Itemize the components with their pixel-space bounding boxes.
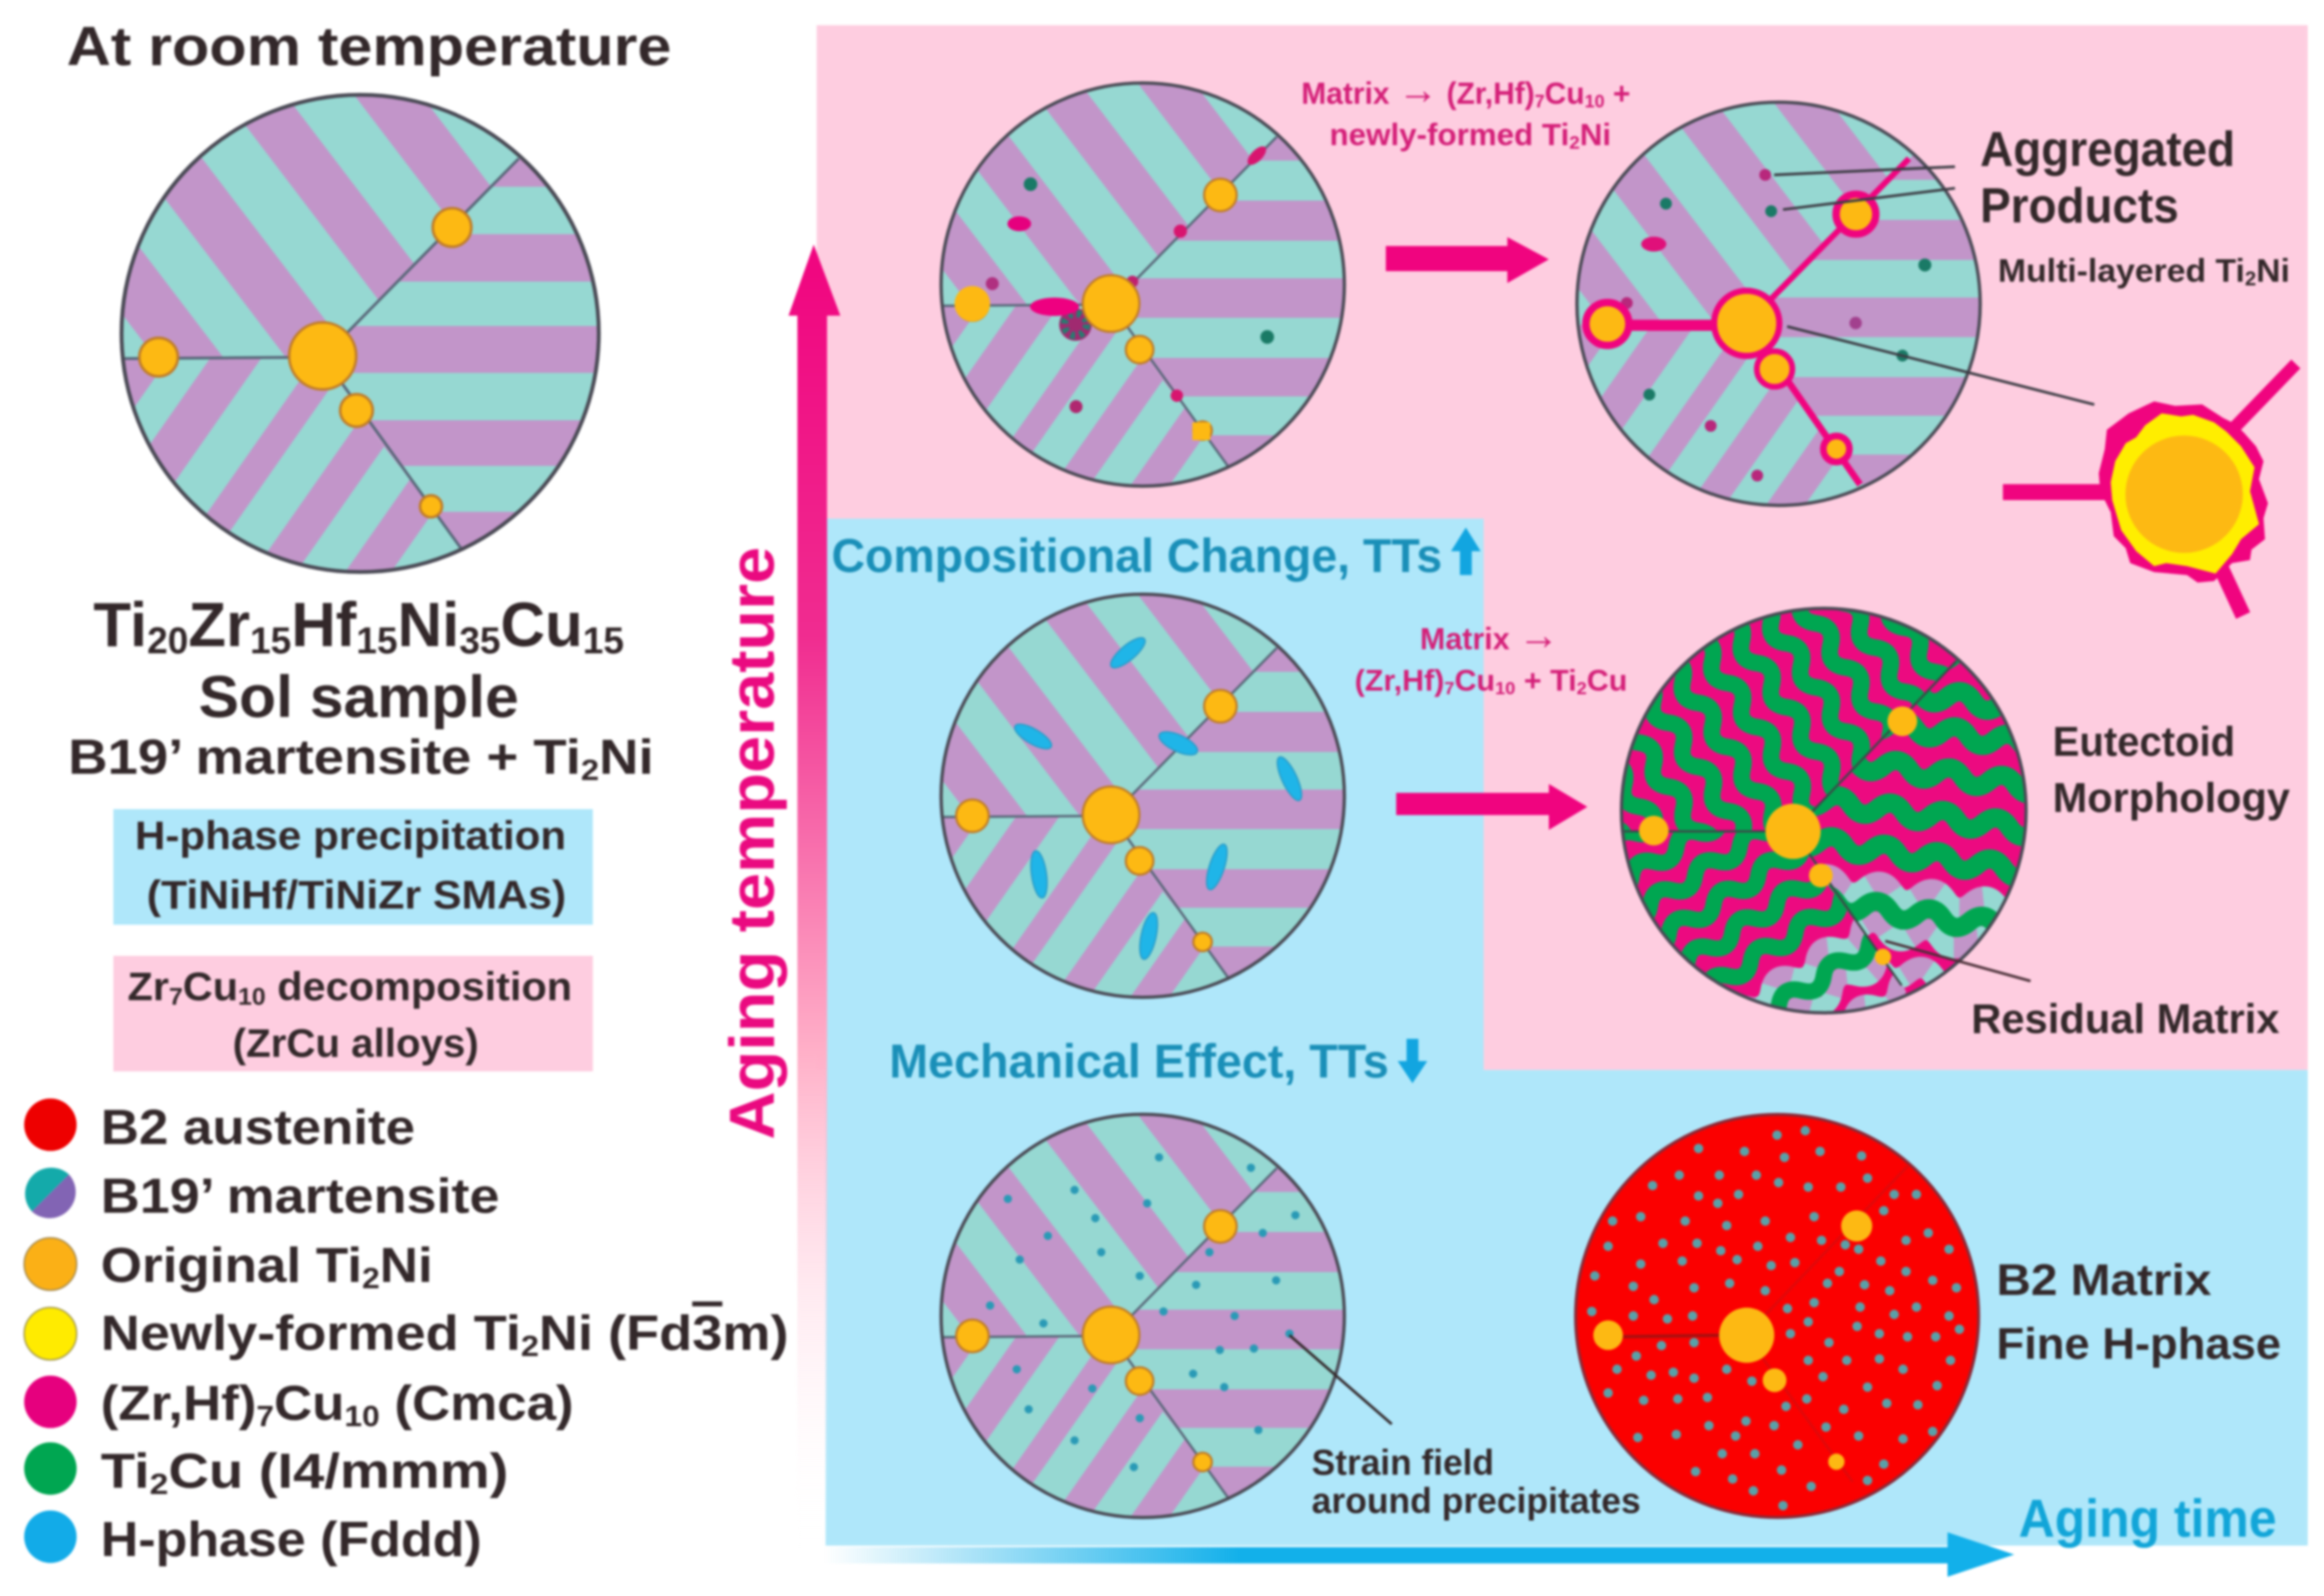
diagram: initial sol sample microstructure: [0, 59, 711, 623]
reaction label: matrix to Zr,Hf 7Cu10 and newly-formed Ti2Ni: Matrix → (Zr,Hf)7Cu10 +: [1301, 66, 1630, 112]
legend item: (Zr,Hf)7Cu10: (Zr,Hf) 7Cu 10 (Cmca): [101, 1376, 573, 1432]
label: strain field around precipitates: Strain field: [1312, 1443, 1494, 1483]
leader line: to enlarged particle: [1787, 326, 2094, 404]
grain boundary magenta layers: [1608, 158, 1909, 484]
panel: pink aging region: [817, 25, 2308, 1070]
arrow: aging temperature axis: [788, 244, 840, 1548]
precipitate: mottled cluster: [1060, 308, 1092, 341]
label: strain field around precipitates: around precipitates: [1312, 1482, 1641, 1521]
precipitates: green dots: [1644, 198, 1931, 401]
leader line: strain field: [1290, 1335, 1392, 1424]
reaction label: matrix to Zr,Hf 7Cu10 and newly-formed Ti2Ni: newly-formed Ti2Ni: [1329, 119, 1611, 154]
particles: original Ti2Ni: [1593, 1210, 1872, 1470]
precipitates: H-phase lenticular: [1011, 634, 1306, 961]
diagram: strain field around fine precipitates: [725, 1085, 1439, 1560]
icon: up arrow: [1451, 528, 1481, 575]
legend item: B19' martensite: B19’ martensite: [101, 1169, 500, 1224]
heading: mechanical effect: Mechanical Effect, TTs: [890, 1035, 1388, 1088]
label: aggregated products: Aggregated: [1980, 122, 2235, 177]
legend item: newly-formed Ti2Ni: Newly-formed Ti 2Ni (Fd 3m): [101, 1306, 788, 1362]
particles: original Ti2Ni: [1639, 706, 1917, 965]
grain boundaries: [1623, 661, 1956, 986]
heading: phases of sol sample: B19’ martensite + Ti 2Ni: [68, 730, 653, 785]
panel: blue aging region: [826, 519, 2308, 1546]
particles: partially consumed Ti2Ni: [954, 286, 1211, 440]
label: multi-layered Ti2Ni: Multi-layered Ti 2Ni: [1998, 252, 2290, 290]
legend: phases: [24, 1098, 788, 1566]
diagram: eutectoid morphology: [1618, 605, 2029, 1016]
precipitates: magenta: [986, 143, 1269, 413]
diagram: B2 matrix with fine H-phase: [1575, 1114, 1979, 1518]
heading: sol sample: Sol sample: [199, 663, 519, 730]
leader line: residual matrix: [1885, 941, 2030, 981]
inset: enlarged multi-layered Ti2Ni particle: [2003, 364, 2296, 616]
legend item: original Ti2Ni: Original Ti 2Ni: [101, 1237, 433, 1294]
label: B2 matrix fine H-phase: Fine H-phase: [1997, 1319, 2281, 1369]
leader lines: aggregated products: [1774, 167, 1955, 209]
grain boundaries: [1623, 1165, 1909, 1482]
legend item: B2 austenite: B2 austenite: [101, 1100, 415, 1155]
precipitates: green: [1024, 177, 1274, 344]
callout: Zr7Cu10 decomposition: Zr7Cu10 decomposition: [128, 965, 572, 1010]
heading: alloy composition: Ti20Zr15Hf15Ni35Cu15: [93, 590, 624, 661]
label: eutectoid morphology: Eutectoid: [2053, 718, 2235, 765]
legend item: H-phase: H-phase (Fddd): [101, 1512, 482, 1566]
precipitates: fine H-phase dots: [1587, 1126, 1965, 1511]
arrow: middle stage progression: [1397, 784, 1587, 829]
arrow: aging time axis: [824, 1532, 2014, 1577]
label: eutectoid morphology: Morphology: [2053, 775, 2290, 821]
reaction label: matrix to Zr,Hf 7Cu10 and Ti2Cu: Matrix →: [1420, 611, 1559, 658]
diagram: H-phase lenticular precipitates: [725, 564, 1439, 1040]
label: eutectoid morphology: [2053, 718, 2290, 821]
axis label: aging time: Aging time: [2018, 1488, 2276, 1548]
reaction label: matrix to Zr,Hf 7Cu10 and Ti2Cu: [1354, 611, 1628, 698]
precipitates: magenta dots: [1621, 169, 1862, 482]
label: B2 matrix fine H-phase: B2 Matrix: [1997, 1255, 2212, 1305]
callout: H-phase precipitation: (TiNiHf/TiNiZr SMAs): [146, 873, 566, 918]
label: aggregated products: [1980, 122, 2235, 233]
callout: Zr7Cu10 decomposition: (ZrCu alloys): [233, 1022, 479, 1066]
legend item: Ti2Cu: Ti 2Cu (I4/mmm): [101, 1444, 509, 1500]
axis label: aging temperature: Aging temperature: [717, 546, 788, 1139]
label: strain field around precipitates: [1312, 1443, 1641, 1521]
callout: H-phase precipitation: [113, 809, 593, 925]
reaction label: matrix to Zr,Hf 7Cu10 and Ti2Cu: (Zr,Hf)7Cu10 + Ti2Cu: [1354, 663, 1628, 698]
label: B2 matrix fine H-phase: [1997, 1255, 2281, 1369]
heading: compositional change: Compositional Change, TTs: [831, 530, 1442, 583]
label: residual matrix: Residual Matrix: [1971, 995, 2280, 1042]
arrow: upper stage progression: [1386, 237, 1548, 283]
title: at room temperature: At room temperature: [67, 16, 671, 77]
coated particles: [1586, 194, 1876, 462]
diagram: aggregated products stage: [1362, 72, 2075, 548]
callout: H-phase precipitation: H-phase precipitation: [135, 814, 566, 858]
diagram: early aggregated products stage: [725, 53, 1439, 528]
icon: down arrow: [1397, 1039, 1427, 1083]
reaction label: matrix to Zr,Hf 7Cu10 and newly-formed Ti2Ni: [1301, 66, 1630, 154]
label: aggregated products: Products: [1980, 178, 2178, 233]
precipitates: fine H-phase dots: [986, 1153, 1299, 1471]
callout: Zr7Cu10 decomposition: [113, 956, 593, 1071]
